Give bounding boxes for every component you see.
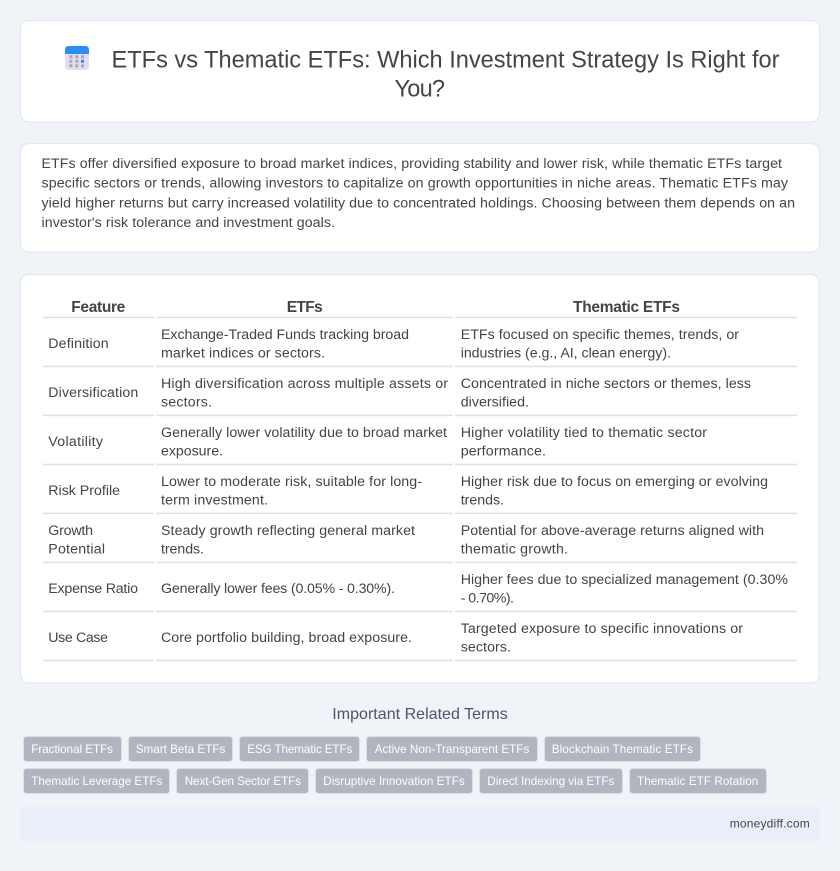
row: diversification xyxy=(48,376,751,410)
tag xyxy=(128,736,232,762)
tag: Active Non-Transparent ETFs xyxy=(375,743,529,756)
tag: ESG Thematic ETFs xyxy=(247,743,352,756)
panel: comparison table xyxy=(20,274,819,683)
intro text xyxy=(42,156,795,231)
tags: related terms xyxy=(24,736,766,794)
intro text: investor's risk tolerance and investment goals. xyxy=(42,215,335,231)
tag xyxy=(176,768,308,794)
tag: Blockchain Thematic ETFs xyxy=(552,743,693,756)
row: diversification: Diversification xyxy=(48,385,138,401)
intro text: specific sectors or trends, allowing investors to capitalize on growth opportunities in niche areas. Thematic ETFs may xyxy=(42,176,789,192)
intro text: yield higher returns but carry increased volatility due to concentrated holdings. Choosing between them depends on an xyxy=(42,195,795,211)
row: growth potential: Steady growth reflecting general market xyxy=(161,523,415,539)
row: growth potential: thematic growth. xyxy=(461,542,568,558)
tag xyxy=(240,736,360,762)
row: expense ratio: - 0.70%). xyxy=(461,590,514,606)
tag xyxy=(480,768,622,794)
row: growth potential: Growth xyxy=(48,523,93,539)
panel: introduction xyxy=(20,144,820,252)
footer: moneydiff.com xyxy=(730,817,810,831)
tag: Smart Beta ETFs xyxy=(136,743,225,756)
row: diversification: High diversification across multiple assets or xyxy=(161,376,448,392)
table header row: Feature xyxy=(71,299,126,316)
row: volatility: Volatility xyxy=(48,434,104,450)
title xyxy=(112,48,780,102)
row: risk profile xyxy=(48,474,768,508)
tag: Thematic ETF Rotation xyxy=(637,775,758,788)
row: growth potential xyxy=(48,523,764,558)
table header row xyxy=(71,299,680,316)
row: definition: market indices or sectors. xyxy=(161,346,325,362)
row: risk profile: trends. xyxy=(461,492,504,508)
tag: Direct Indexing via ETFs xyxy=(487,775,614,788)
row: use case: Use Case xyxy=(48,630,108,646)
row: diversification: Concentrated in niche sectors or themes, less xyxy=(461,376,751,392)
footer xyxy=(20,807,820,841)
row: growth potential: trends. xyxy=(161,542,204,558)
row: volatility: exposure. xyxy=(161,444,223,460)
row: volatility: Higher volatility tied to thematic sector xyxy=(461,425,707,441)
tag: Disruptive Innovation ETFs xyxy=(323,775,465,788)
row: diversification: sectors. xyxy=(161,394,212,410)
panel: header xyxy=(20,20,820,122)
row: risk profile: Higher risk due to focus on emerging or evolving xyxy=(461,474,768,490)
tag xyxy=(366,736,538,762)
table header row: Thematic ETFs xyxy=(573,299,680,316)
row: use case: sectors. xyxy=(461,640,511,656)
table header row: ETFs xyxy=(287,299,323,316)
row: volatility xyxy=(48,425,707,460)
row: expense ratio xyxy=(48,572,788,606)
heading: related terms: Important Related Terms xyxy=(332,706,508,723)
row: expense ratio: Higher fees due to specialized management (0.30% xyxy=(461,572,788,588)
row: expense ratio: Generally lower fees (0.05% - 0.30%). xyxy=(161,581,395,597)
row: diversification: diversified. xyxy=(461,394,529,410)
row: use case xyxy=(48,621,743,656)
title: ETFs vs Thematic ETFs: Which Investment Strategy Is Right for xyxy=(112,48,780,74)
row: definition: Definition xyxy=(48,336,109,352)
row: use case: Targeted exposure to specific innovations or xyxy=(461,621,743,637)
tag: Thematic Leverage ETFs xyxy=(31,775,162,788)
row: volatility: performance. xyxy=(461,444,546,460)
intro text: ETFs offer diversified exposure to broad market indices, providing stability and lower risk, while thematic ETFs target xyxy=(42,156,782,172)
tag xyxy=(24,768,170,794)
icon: calendar xyxy=(65,46,89,70)
row: volatility: Generally lower volatility due to broad market xyxy=(161,425,447,441)
row: growth potential: Potential for above-average returns aligned with xyxy=(461,523,764,539)
tag xyxy=(544,736,700,762)
tag xyxy=(316,768,472,794)
row: expense ratio: Expense Ratio xyxy=(48,581,138,597)
row: risk profile: term investment. xyxy=(161,492,268,508)
tag: Fractional ETFs xyxy=(31,743,113,756)
row: definition: industries (e.g., AI, clean energy). xyxy=(461,346,671,362)
row: definition: ETFs focused on specific themes, trends, or xyxy=(461,327,739,343)
row: use case: Core portfolio building, broad exposure. xyxy=(161,630,412,646)
tag: Next-Gen Sector ETFs xyxy=(185,775,301,788)
row: risk profile: Lower to moderate risk, suitable for long- xyxy=(161,474,422,490)
row: growth potential: Potential xyxy=(48,542,105,558)
tag xyxy=(24,736,122,762)
row: definition: Exchange-Traded Funds tracking broad xyxy=(161,327,409,343)
title: You? xyxy=(394,76,445,102)
row: definition xyxy=(48,327,739,362)
row: risk profile: Risk Profile xyxy=(48,483,120,499)
tag xyxy=(630,768,766,794)
